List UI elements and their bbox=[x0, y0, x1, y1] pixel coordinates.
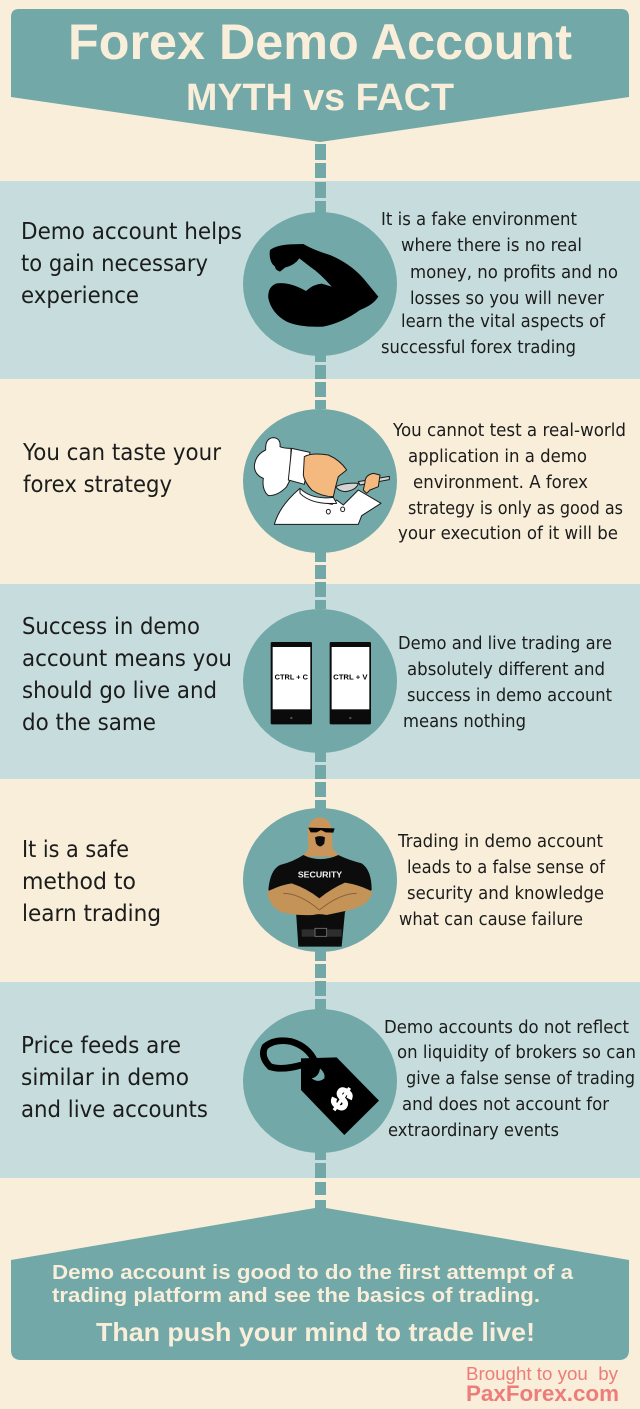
circle with price tag icon: $ bbox=[325, 1080, 359, 1118]
myth 1 text bbox=[21, 219, 242, 309]
conclusion banner bbox=[11, 1208, 629, 1360]
circle with phones icon: CTRL + C bbox=[275, 673, 309, 682]
fact 3 text: Demo and live trading are bbox=[398, 634, 612, 654]
fact 2 text: You cannot test a real-world bbox=[392, 421, 626, 441]
myth 4 text: method to bbox=[22, 869, 136, 895]
panel: myth and fact 3 bbox=[22, 609, 612, 753]
fact 1 text: successful forex trading bbox=[381, 338, 576, 358]
panel: myth and fact 1 bbox=[21, 210, 618, 358]
fact 2 text: your execution of it will be bbox=[398, 524, 618, 544]
fact 1 text: where there is no real bbox=[401, 236, 582, 256]
myth 2 text: forex strategy bbox=[23, 472, 172, 498]
myth 2 text: You can taste your bbox=[22, 440, 222, 466]
title: Forex Demo Account bbox=[68, 14, 572, 70]
myth 4 text bbox=[22, 837, 161, 927]
call to action: Than push your mind to trade live! bbox=[96, 1317, 535, 1347]
myth 3 text: Success in demo bbox=[22, 614, 200, 640]
fact 3 text: means nothing bbox=[403, 712, 526, 732]
brand name: PaxForex.com bbox=[466, 1381, 619, 1406]
fact 4 text: security and knowledge bbox=[407, 884, 604, 904]
fact 3 text: absolutely different and bbox=[407, 660, 605, 680]
myth 5 text bbox=[21, 1033, 208, 1123]
fact 3 text bbox=[398, 634, 612, 732]
fact 1 text: money, no profits and no bbox=[410, 263, 618, 283]
fact 4 text: Trading in demo account bbox=[397, 832, 603, 852]
title banner bbox=[11, 9, 629, 142]
panel: myth and fact 2 bbox=[22, 409, 626, 553]
credit: Brought to you by bbox=[466, 1364, 618, 1384]
fact 2 text bbox=[392, 421, 626, 544]
panel: myth and fact 4 bbox=[22, 808, 606, 952]
fact 4 text bbox=[397, 832, 606, 930]
myth 2 text bbox=[22, 440, 222, 498]
circle with chef icon bbox=[243, 409, 397, 553]
fact 2 text: environment. A forex bbox=[413, 473, 588, 493]
fact 5 text: and does not account for bbox=[402, 1095, 610, 1115]
fact 4 text: leads to a false sense of bbox=[407, 858, 606, 878]
myth 3 text: account means you bbox=[22, 646, 232, 672]
conclusion text: Demo account is good to do the first attempt of a bbox=[52, 1262, 574, 1284]
myth 1 text: experience bbox=[21, 283, 139, 309]
myth 4 text: learn trading bbox=[22, 901, 161, 927]
fact 2 text: application in a demo bbox=[408, 447, 587, 467]
conclusion text line 2: trading platform and see the basics of trading. bbox=[52, 1285, 540, 1307]
fact 2 text: strategy is only as good as bbox=[408, 499, 623, 519]
panel: myth and fact 5 bbox=[21, 1009, 636, 1153]
myth 5 text: similar in demo bbox=[21, 1065, 189, 1091]
circle with phones icon bbox=[243, 609, 397, 753]
fact 4 text: what can cause failure bbox=[399, 910, 583, 930]
myth 3 text bbox=[22, 614, 232, 736]
fact 1 text: losses so you will never bbox=[410, 289, 605, 309]
subtitle: MYTH vs FACT bbox=[186, 77, 454, 119]
fact 1 text: It is a fake environment bbox=[381, 210, 577, 230]
circle with security guard icon: SECURITY bbox=[298, 869, 343, 879]
circle with muscle icon bbox=[243, 212, 397, 356]
myth 1 text: Demo account helps bbox=[21, 219, 242, 245]
fact 1 text: learn the vital aspects of bbox=[401, 312, 606, 332]
fact 5 text: extraordinary events bbox=[388, 1121, 559, 1141]
circle with price tag icon bbox=[243, 1009, 397, 1153]
myth 5 text: Price feeds are bbox=[21, 1033, 181, 1059]
circle with phones icon: CTRL + V bbox=[333, 673, 368, 682]
myth 3 text: should go live and bbox=[22, 678, 217, 704]
fact 5 text: Demo accounts do not reflect bbox=[384, 1018, 629, 1038]
myth 5 text: and live accounts bbox=[21, 1097, 208, 1123]
myth 1 text: to gain necessary bbox=[21, 251, 208, 277]
fact 5 text bbox=[384, 1018, 636, 1141]
myth 3 text: do the same bbox=[22, 710, 156, 736]
fact 1 text bbox=[381, 210, 618, 358]
credit bbox=[466, 1364, 619, 1406]
fact 3 text: success in demo account bbox=[407, 686, 612, 706]
myth 4 text: It is a safe bbox=[22, 837, 129, 863]
circle with security guard icon bbox=[243, 808, 397, 952]
